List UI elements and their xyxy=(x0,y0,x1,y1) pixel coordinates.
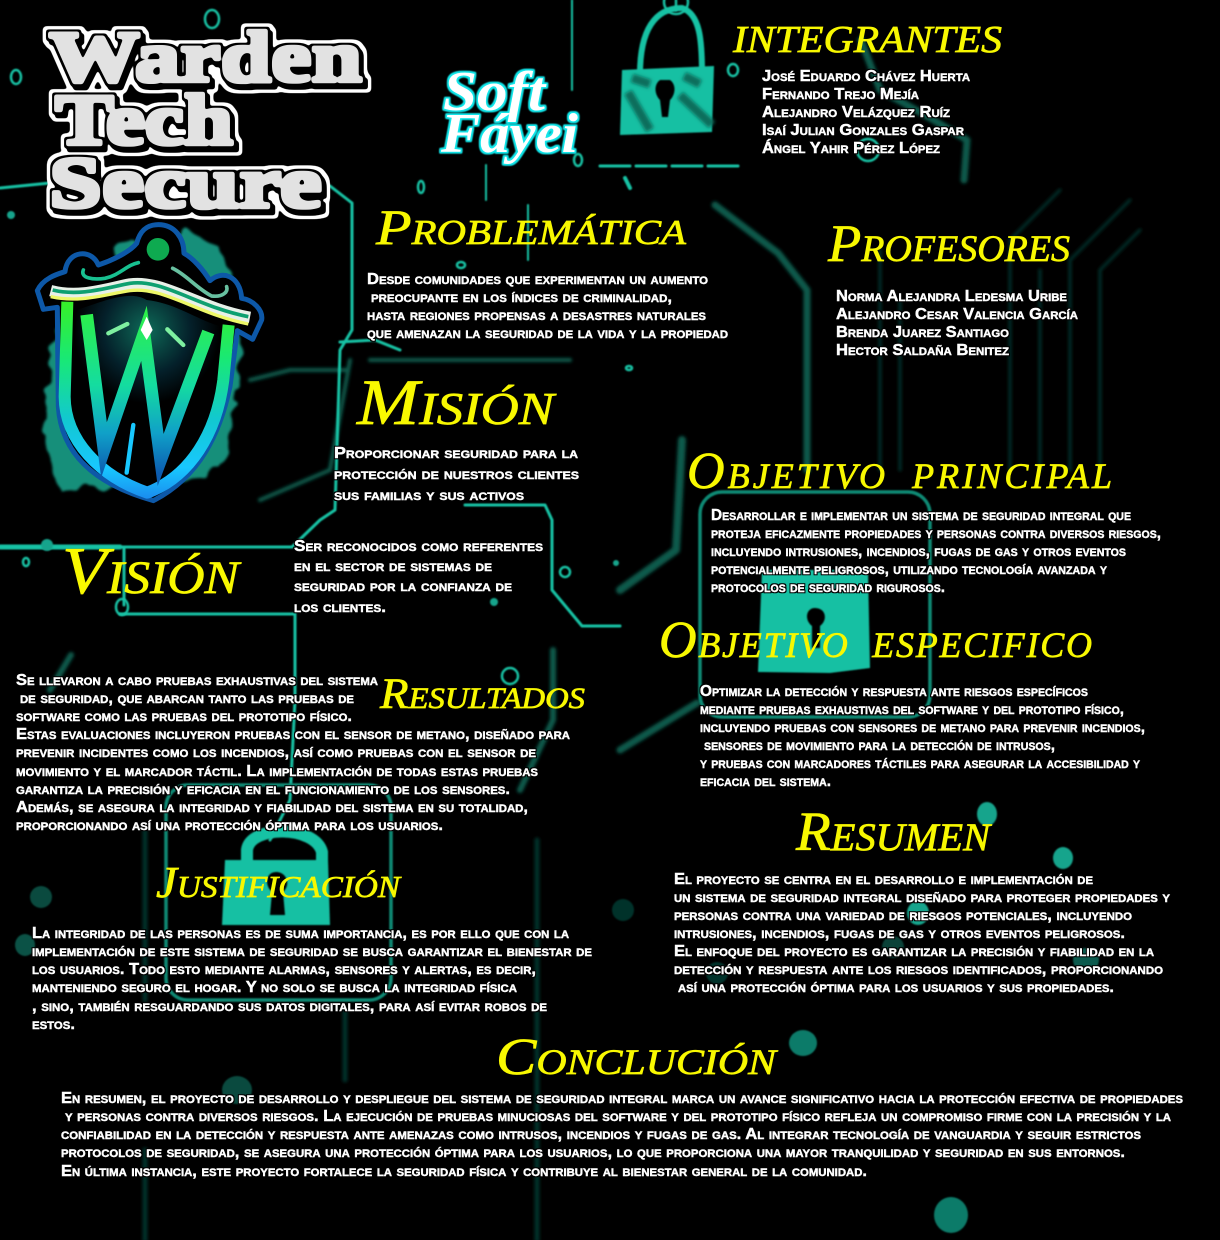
heading: Profesores: Profesores xyxy=(827,215,1070,273)
objetivo principal text: protocolos de seguridad rigurosos. xyxy=(711,579,945,596)
problemática text: preocupante en los índices de criminalidad, xyxy=(371,289,672,306)
objetivo especifico text: mediante pruebas exhaustivas del software y del prototipo físico, xyxy=(700,701,1124,718)
problemática text: Desde comunidades que experimentan un aumento xyxy=(367,271,708,288)
title: Warden Tech Secure: Tech xyxy=(55,80,233,160)
title: Warden Tech Secure: Secure xyxy=(49,143,322,223)
circuit node rings xyxy=(11,0,879,684)
panel: resumen xyxy=(674,801,1171,996)
list of professors: Norma Alejandra Ledesma Uribe xyxy=(836,288,1067,305)
resumen text: así una protección óptima para los usuarios y sus propiedades. xyxy=(678,979,1114,996)
justificación text: estos. xyxy=(32,1016,75,1033)
padlock: top xyxy=(620,8,714,135)
problemática text: hasta regiones propensas a desastres naturales xyxy=(367,307,706,324)
shield inner glow xyxy=(72,296,222,482)
conclución text: En última instancia, este proyecto fortalece la seguridad física y contribuye al bienestar general de la comunidad. xyxy=(61,1163,867,1180)
conclución text: En resumen, el proyecto de desarrollo y despliegue del sistema de seguridad integral marca un avance significativo hacia la protección efectiva de propiedades xyxy=(61,1090,1183,1107)
resultados text: Estas evaluaciones incluyeron pruebas con el sensor de metano, diseñado para xyxy=(16,726,570,743)
objetivo principal text: potencialmente peligrosos, utilizando tecnología avanzada y xyxy=(711,561,1108,578)
resultados text: Además, se asegura la integridad y fiabilidad del sistema en su totalidad, xyxy=(16,799,528,816)
objetivo principal text xyxy=(711,507,1161,596)
resumen text: intrusiones, incendios, fugas de gas y otros eventos peligrosos. xyxy=(674,925,1125,942)
panel: objetivo principal xyxy=(687,443,1161,596)
problemática text: que amenazan la seguridad de la vida y la propiedad xyxy=(367,325,728,342)
conclución text xyxy=(61,1090,1183,1180)
heading: Conclución: Conclución xyxy=(496,1029,778,1086)
justificación text: La integridad de las personas es de suma importancia, es por ello que con la xyxy=(32,925,569,942)
heading: Problemática: Problemática xyxy=(375,199,687,255)
list of members: Fernando Trejo Mejía xyxy=(762,86,919,103)
letter W xyxy=(87,315,208,460)
resumen text: El enfoque del proyecto es garantizar la precisión y fiabilidad en la xyxy=(674,943,1154,960)
resultados text: software como las pruebas del prototipo físico. xyxy=(16,708,352,725)
problemática text xyxy=(367,271,728,342)
list of professors: Brenda Juarez Santiago xyxy=(836,324,1009,341)
list of members: Isaí Julian Gonzales Gaspar xyxy=(762,122,964,139)
misión text: Proporcionar seguridad para la xyxy=(334,445,578,462)
resultados text xyxy=(16,672,570,834)
heading: Integrantes: INTEGRANTES xyxy=(732,19,1002,61)
bright circuit traces xyxy=(0,0,742,840)
resultados text: proporcionando así una protección óptima para los usuarios. xyxy=(16,817,443,834)
misión text: protección de nuestros clientes xyxy=(334,466,579,483)
list of members: Ángel Yahir Pérez López xyxy=(762,138,940,157)
resultados text: movimiento y el marcador táctil. La implementación de todas estas pruebas xyxy=(16,763,538,780)
panel: resultados xyxy=(16,671,585,834)
resultados text: prevenir incidentes como los incendios, así como pruebas con el sensor de xyxy=(16,744,536,761)
W rays xyxy=(108,324,183,473)
heading: Objetivo principal: Objetivo principal xyxy=(687,443,1112,500)
curl ornaments xyxy=(83,263,227,296)
resumen text: detección y respuesta ante los riesgos identificados, proporcionando xyxy=(674,961,1163,978)
logo: W shield xyxy=(37,225,262,501)
brand: Soft Fayei: Soft xyxy=(443,61,547,123)
heading: Visión: Visión xyxy=(62,534,242,608)
brand: Soft Fayei xyxy=(440,61,578,165)
resumen text: El proyecto se centra en el desarrollo e implementación de xyxy=(674,871,1093,888)
panel: justificación xyxy=(32,858,592,1033)
objetivo especifico text: sensores de movimiento para la detección de intrusos, xyxy=(704,737,1055,754)
visión text: Ser reconocidos como referentes xyxy=(294,538,543,555)
panel: objetivo especifico xyxy=(659,612,1145,790)
heading: Resultados: Resultados xyxy=(379,671,585,718)
resultados text: de seguridad, que abarcan tanto las pruebas de xyxy=(20,690,354,707)
objetivo especifico text: Optimizar la detección y respuesta ante riesgos específicos xyxy=(700,683,1088,700)
visión text: los clientes. xyxy=(294,599,386,616)
panel: profesores xyxy=(827,215,1078,359)
justificación text: los usuarios. Todo esto mediante alarmas, sensores y alertas, es decir, xyxy=(32,961,536,978)
justificación text: manteniendo seguro el hogar. Y no solo se busca la integridad física xyxy=(32,979,517,996)
resumen text: un sistema de seguridad integral diseñado para proteger propiedades y xyxy=(674,889,1171,906)
visión text: seguridad por la confianza de xyxy=(294,578,512,595)
list of professors: Hector Saldaña Benitez xyxy=(836,342,1009,359)
objetivo especifico text: y pruebas con marcadores táctiles para asegurar la accesibilidad y xyxy=(700,755,1141,772)
banner band xyxy=(51,283,250,324)
objetivo especifico text xyxy=(700,683,1145,790)
justificación text: implementación de este sistema de seguridad se busca garantizar el bienestar de xyxy=(32,943,592,960)
circuit node dots xyxy=(7,211,1099,1233)
heading: Justificación: Justificación xyxy=(156,858,402,907)
title: Warden Tech Secure xyxy=(49,17,362,223)
objetivo principal text: proteja eficazmente propiedades y personas contra diversos riesgos, xyxy=(711,525,1161,542)
brand: Soft Fayei: Fáyei xyxy=(440,103,578,165)
objetivo especifico text: incluyendo pruebas con sensores de metano para prevenir incendios, xyxy=(700,719,1145,736)
resultados text: garantiza la precisión y eficacia en el funcionamiento de los sensores. xyxy=(16,781,510,798)
visión text xyxy=(294,538,543,616)
resumen text xyxy=(674,871,1171,996)
misión text: sus familias y sus activos xyxy=(334,487,524,504)
panel: visión xyxy=(62,534,543,616)
resultados text: Se llevaron a cabo pruebas exhaustivas del sistema xyxy=(16,672,378,689)
list of members: Alejandro Velázquez Ruíz xyxy=(762,104,950,121)
panel: integrantes xyxy=(732,19,1002,157)
teal blob behind logo xyxy=(45,232,240,490)
conclución text: confiabilidad en la detección y respuesta ante amenazas como intrusos, incendios y fugas de gas. Al integrar tecnología de vanguardia y seguir estrictos xyxy=(61,1126,1141,1143)
objetivo principal text: incluyendo intrusiones, incendios, fugas de gas y otros eventos xyxy=(711,543,1126,560)
panel: conclución xyxy=(61,1029,1183,1180)
justificación text xyxy=(32,925,592,1033)
title: Warden Tech Secure: Warden xyxy=(49,17,362,97)
visión text: en el sector de sistemas de xyxy=(294,558,492,575)
padlock: lower left xyxy=(166,785,391,1000)
heading: Objetivo especifico: Objetivo especifico xyxy=(659,612,1092,669)
list of professors xyxy=(836,288,1078,359)
green gem xyxy=(147,238,169,261)
shield frame xyxy=(65,302,229,493)
panel: problemática xyxy=(367,199,728,342)
shield outline xyxy=(37,225,262,501)
objetivo especifico text: eficacia del sistema. xyxy=(700,773,831,790)
resumen text: personas contra una variedad de riesgos potenciales, incluyendo xyxy=(674,907,1132,924)
conclución text: y personas contra diversos riesgos. La ejecución de pruebas minuciosas del software y del prototipo físico refleja un compromiso firme con la precisión y la xyxy=(65,1108,1171,1125)
padlock: centre xyxy=(700,492,930,717)
heading: Resumen: Resumen xyxy=(795,801,992,862)
justificación text: , sino, también resguardando sus datos digitales, para así evitar robos de xyxy=(32,998,547,1015)
list of professors: Alejandro Cesar Valencia García xyxy=(836,306,1078,323)
W highlight xyxy=(141,317,153,340)
conclución text: protocolos de seguridad, se asegura una protección óptima para los usuarios, lo que proporciona una mayor tranquilidad y seguridad en sus entornos. xyxy=(61,1144,1125,1161)
misión text xyxy=(334,445,579,504)
panel: misión xyxy=(334,367,579,504)
list of members: José Eduardo Chávez Huerta xyxy=(762,68,970,85)
list of members xyxy=(762,68,970,157)
objetivo principal text: Desarrollar e implementar un sistema de seguridad integral que xyxy=(711,507,1131,524)
heading: Misión: Misión xyxy=(356,367,557,439)
